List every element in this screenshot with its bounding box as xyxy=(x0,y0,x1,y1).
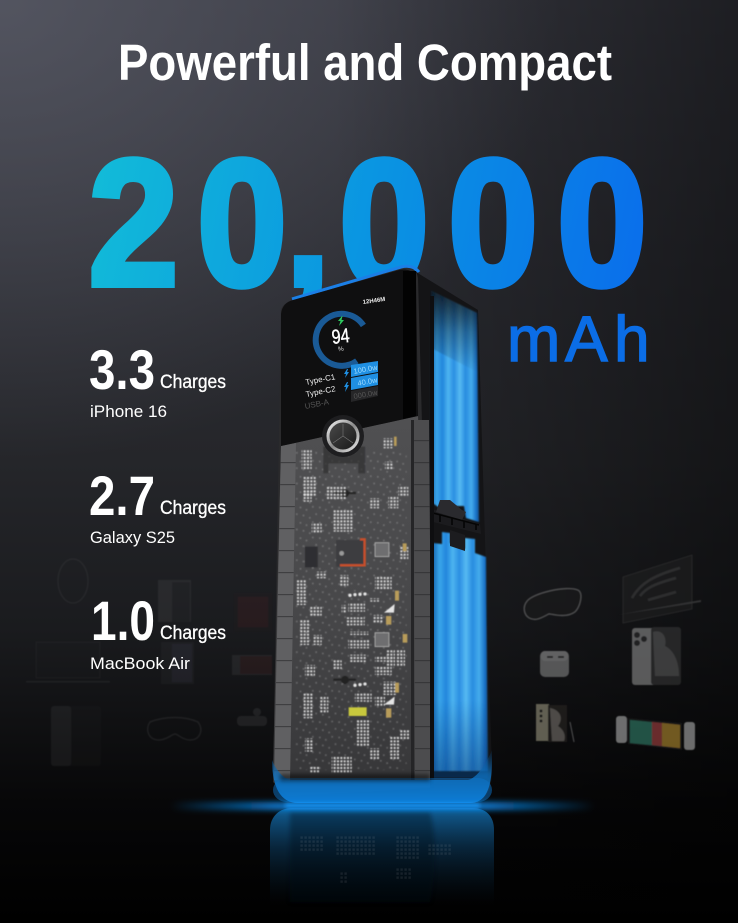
stat: Galaxy S25: Charges xyxy=(160,498,226,519)
reflection xyxy=(270,808,494,905)
red chip xyxy=(336,539,365,567)
glowing base xyxy=(272,750,492,803)
title: Powerful and Compact xyxy=(118,34,612,91)
knob xyxy=(322,415,364,457)
glow line xyxy=(170,802,595,810)
base glow highlight xyxy=(285,803,480,808)
screen: port rows: Type-C1 xyxy=(305,372,337,387)
stat: iPhone 16: 3.3 xyxy=(89,338,155,401)
screen: port rows: USB-A xyxy=(304,397,330,411)
front shell xyxy=(273,267,432,796)
white parts xyxy=(384,604,395,705)
grey chips xyxy=(375,543,389,647)
screen: port rows xyxy=(304,361,379,411)
screen: bolt xyxy=(338,316,344,326)
icon: phone xyxy=(161,642,194,684)
blue cells lower xyxy=(433,532,488,778)
icon: samsung phone xyxy=(158,580,191,622)
power bank xyxy=(272,266,492,803)
stat: Galaxy S25: Galaxy S25 xyxy=(90,528,175,547)
stat: MacBook Air: 1.0 xyxy=(91,589,155,652)
screen: port rows: 40.0w xyxy=(357,375,379,388)
stat: MacBook Air: MacBook Air xyxy=(90,654,190,673)
icon: laptop xyxy=(26,642,110,682)
icon: tablet xyxy=(234,593,272,631)
icon: headset xyxy=(524,588,581,619)
right ribs xyxy=(414,420,432,780)
stat: Galaxy S25: 2.7 xyxy=(89,464,155,527)
icon: earbuds xyxy=(540,651,569,677)
stat: MacBook Air xyxy=(90,589,226,673)
screen: port rows: 000.0w xyxy=(353,388,379,401)
mosfets xyxy=(333,489,356,684)
top blue rim xyxy=(292,266,419,299)
pcb board xyxy=(273,416,432,788)
right side housing xyxy=(416,272,492,803)
left ribs xyxy=(274,443,296,782)
icon: watch xyxy=(58,559,88,603)
screen: percent: % xyxy=(338,346,344,353)
icon: samsung phone xyxy=(536,704,574,742)
screen: time: 12H46M xyxy=(362,297,386,306)
display panel xyxy=(281,270,418,446)
stat: Galaxy S25 xyxy=(89,464,226,547)
yellow chip xyxy=(349,707,367,716)
icon: iphone xyxy=(51,706,101,766)
ghost devices: left xyxy=(26,559,272,766)
screen: percent: 94 xyxy=(331,325,351,349)
capacity unit: mAh xyxy=(507,303,650,375)
stat: iPhone 16: iPhone 16 xyxy=(90,402,167,421)
icon: laptop xyxy=(617,555,701,623)
stat: iPhone 16 xyxy=(89,338,226,421)
stat: MacBook Air: Charges xyxy=(160,623,226,644)
ghost devices: right xyxy=(524,555,701,750)
stat: iPhone 16: Charges xyxy=(160,372,226,393)
screen: port rows: Type-C2 xyxy=(305,384,337,399)
circuit components xyxy=(295,450,410,773)
screen: port rows: 100.0w xyxy=(353,363,379,376)
screen: battery ring xyxy=(314,312,366,368)
gold parts xyxy=(386,543,407,718)
icon: iphone xyxy=(632,627,681,685)
cell clip xyxy=(432,500,481,551)
blue cells upper xyxy=(431,291,479,522)
icon: switch xyxy=(232,655,272,675)
icon: earbuds xyxy=(237,708,267,726)
icon: game console xyxy=(616,716,695,750)
icon: headset xyxy=(148,718,201,740)
capacity number: 20,000 xyxy=(88,123,647,324)
